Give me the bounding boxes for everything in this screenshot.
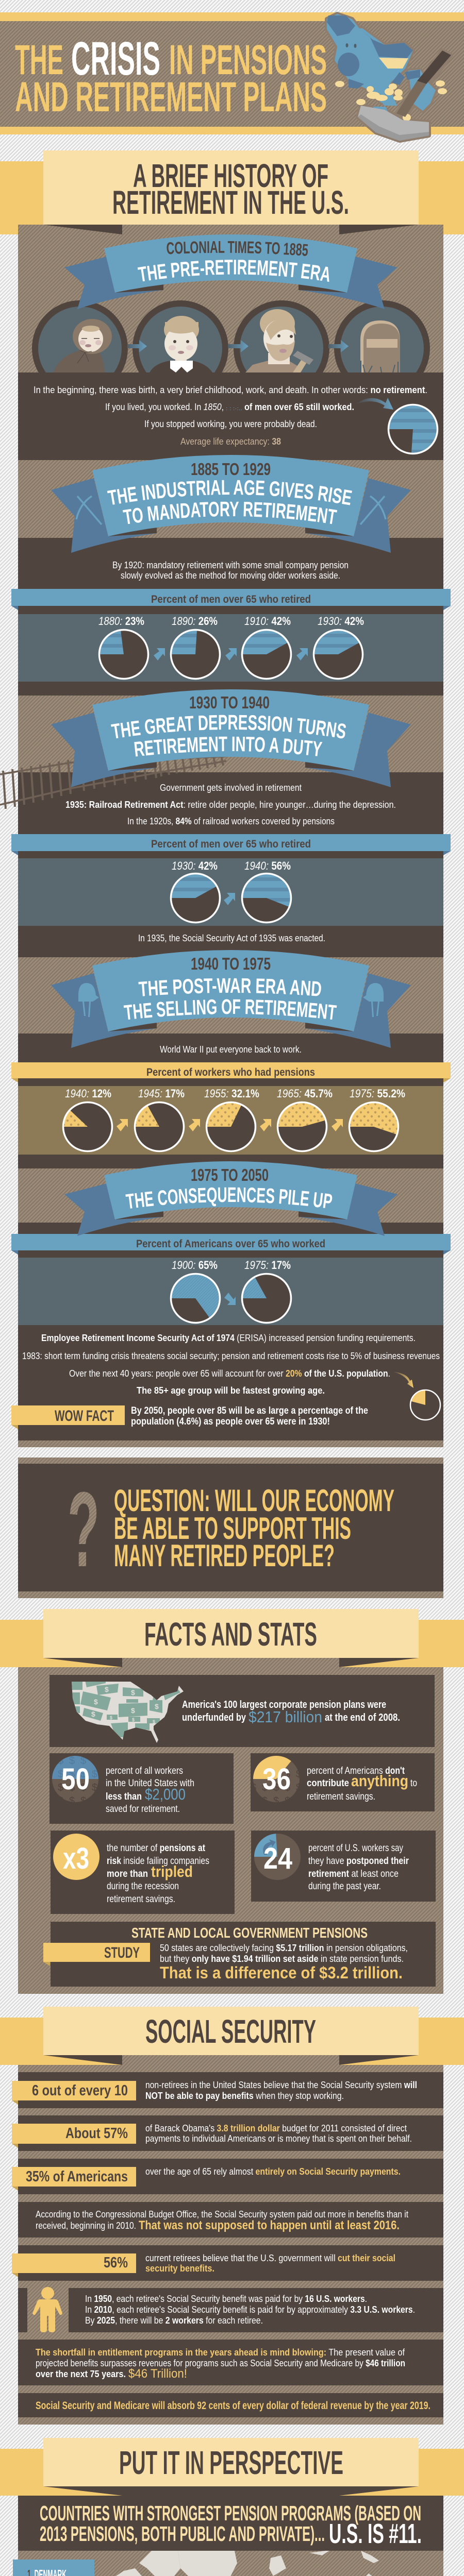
- icon: US map of bills: $: [105, 1685, 109, 1693]
- row: 6 out of 10: [12, 2072, 443, 2108]
- card: tripled pensions at risk: more than: [107, 1868, 148, 1879]
- title: [15, 32, 327, 121]
- row: congressional budget office: That was not supposed to happen until at least 2016.: [139, 2218, 400, 2232]
- row: workers per retiree: In 2010, each retiree's Social Security benefit is paid for by approximately 3.3 U.S. workers.: [85, 2304, 415, 2315]
- text: underfunded: underfunded by: [182, 1712, 246, 1723]
- text: world war II: World War II put everyone back to work.: [160, 1044, 302, 1055]
- text block: government involvement: Government gets involved in retirement: [160, 782, 302, 793]
- row: 56 percent: security benefits.: [145, 2263, 214, 2274]
- chart: men retired 1880-1930: [18, 614, 443, 682]
- ribbon: great depression: 1930 TO 1940: [189, 693, 270, 712]
- card: 24 percent: during the past year.: [308, 1880, 381, 1892]
- ribbon: post-war era: [51, 950, 411, 1048]
- arrow: to small pie: [392, 1371, 413, 1388]
- icon: US map of bills: $: [94, 1698, 98, 1706]
- text: underfunded: America's 100 largest corporate pension plans were: [182, 1699, 386, 1710]
- text block: consequences: [22, 1332, 440, 1396]
- card: tripled pensions at risk: risk inside failing companies: [107, 1855, 209, 1867]
- row: 35 percent of americans: over the age of 65 rely almost entirely on Social Security payments.: [145, 2166, 401, 2177]
- icon: US map of bills: $: [153, 1719, 155, 1724]
- ribbon: colonial times: [64, 234, 397, 309]
- card: 24 percent: they have postponed their: [308, 1855, 409, 1867]
- icon: US map of bills: $: [155, 1702, 159, 1710]
- band: percent of men retired 1930s: [11, 834, 451, 855]
- card: state and local government pensions: STATE AND LOCAL GOVERNMENT PENSIONS: [131, 1925, 368, 1941]
- card: tripled pensions at risk: [51, 1831, 235, 1914]
- row: 56 percent: current retirees believe that the U.S. government will cut their social: [145, 2252, 395, 2263]
- text block: pre-retirement era: : : :·:..: [226, 406, 242, 411]
- card: tripled pensions at risk: the number of pensions at: [107, 1842, 205, 1854]
- title: THE: [15, 37, 63, 83]
- heading: [112, 157, 349, 221]
- text block: pre-retirement era: If you stopped working, you were probably dead.: [144, 418, 317, 429]
- card: 24 percent: percent of U.S. workers say: [308, 1842, 403, 1854]
- card: underfunded pension plans: [49, 1675, 435, 1747]
- card: 36 percent: [251, 1753, 435, 1811]
- text block: pre-retirement era: If you lived, you worked. In 1850,: [105, 401, 224, 412]
- row: 6 out of 10: NOT be able to pay benefits when they stop working.: [145, 2090, 344, 2101]
- title: IN PENSIONS: [169, 37, 327, 83]
- section header: facts and stats: [0, 1609, 464, 1667]
- panel: facts and stats background: [18, 1658, 443, 1994]
- ribbon: post-war era: THE POST-WAR ERA AND: [138, 978, 321, 996]
- title: CRISIS: [71, 32, 160, 85]
- chart: workers with pensions 1940-1975: 1945: 17%: [138, 1087, 185, 1100]
- row: about 57 percent: of Barack Obama's 3.8 trillion dollar budget for 2011 consisted of direct: [145, 2123, 407, 2133]
- ribbon: great depression: RETIREMENT INTO A DUTY: [134, 737, 323, 756]
- chart: men retired 1880-1930: 1910: 42%: [244, 615, 291, 628]
- card: tripled pensions at risk: retirement savings.: [107, 1893, 175, 1905]
- text block: pre-retirement era: Average life expectancy: 38: [180, 436, 281, 447]
- chart: workers with pensions 1940-1975: 1965: 45.7%: [277, 1087, 333, 1100]
- text block: government involvement: 1935: Railroad Retirement Act: retire older people, hire younger…during the depression.: [65, 799, 396, 810]
- row: workers per retiree: In 1950, each retiree's Social Security benefit was paid for by 16 U.S. workers.: [85, 2293, 367, 2304]
- row: 6 out of 10: non-retirees in the United States believe that the Social Security system will: [145, 2079, 417, 2090]
- row: workers per retiree: [18, 2287, 443, 2332]
- chart: americans who worked 1900-1975: [18, 1258, 443, 1325]
- card: 50 percent: percent of all workers: [106, 1765, 183, 1776]
- card: 50 percent: $2,000: [145, 1785, 186, 1803]
- card: 24 percent: [251, 1831, 436, 1902]
- panel: ranking list: [13, 2560, 94, 2576]
- row: congressional budget office: received, beginning in 2010.: [36, 2220, 136, 2231]
- icon: person: [32, 2287, 62, 2332]
- panel: history background blocks: [18, 234, 443, 1447]
- row: about 57 percent: payments to individual Americans or is money that is spent on their behalf.: [145, 2133, 412, 2144]
- band: workers with pensions: Percent of workers who had pensions: [146, 1066, 315, 1078]
- section header: social security: [0, 2007, 464, 2065]
- ribbon: industrial age: THE INDUSTRIAL AGE GIVES RISE: [107, 480, 352, 505]
- row: 92 cents: [18, 2393, 443, 2417]
- card: state and local government pensions: [43, 1922, 436, 1987]
- card: 36 percent: to: [410, 1777, 417, 1789]
- card: 24 percent: 24: [263, 1842, 292, 1875]
- callout: wow fact: population (4.6%) as people over 65 were in 1930!: [131, 1416, 330, 1427]
- ribbon: colonial times: COLONIAL TIMES TO 1885: [167, 241, 308, 256]
- arrow: baby to child: [127, 340, 147, 352]
- text block: 1920 mandatory retirement: slowly evolved as the method for moving older workers aside.: [121, 570, 340, 581]
- row: entitlement shortfall: over the next 75 years.: [36, 2368, 126, 2379]
- icon: US map of bills: $: [132, 1717, 135, 1722]
- ribbon: industrial age: TO MANDATORY RETIREMENT: [123, 502, 337, 524]
- chart: workers with pensions 1940-1975: 1955: 32.1%: [204, 1087, 259, 1100]
- heading: countries with strongest pension programs: [40, 2501, 422, 2549]
- text: underfunded: at the end of 2008.: [325, 1712, 400, 1723]
- chart: men retired 1880-1930: 1890: 26%: [172, 615, 218, 628]
- icon: worker with hammer: [245, 309, 313, 372]
- pie: share of population over 65: [410, 1390, 440, 1420]
- arrow: to 75% pie: [355, 398, 393, 410]
- tag: study: [43, 1943, 150, 1966]
- card: 50 percent: 50: [61, 1762, 90, 1796]
- icon: US map of bills: $: [131, 1706, 135, 1715]
- chart: men retired 1880-1930: 1880: 23%: [98, 615, 144, 628]
- icon: helmets: [78, 983, 384, 1017]
- callout: wow fact: WOW FACT: [55, 1408, 114, 1425]
- band: americans who worked: [11, 1234, 451, 1255]
- row: 56 percent: 56%: [104, 2255, 128, 2271]
- callout: wow fact: [11, 1405, 368, 1429]
- text: underfunded: [182, 1699, 400, 1726]
- icon: hammer smashing piggy bank: [327, 14, 451, 141]
- row: 35 percent of americans: [12, 2159, 443, 2194]
- card: 24 percent: retirement at least once: [308, 1868, 399, 1879]
- card: 36 percent: retirement savings.: [307, 1791, 375, 1802]
- pie: 1850 men working: [389, 405, 437, 453]
- row: about 57 percent: About 57%: [65, 2125, 128, 2142]
- card: tripled pensions at risk: x3: [63, 1842, 89, 1875]
- section header: put it in perspective: [0, 2438, 464, 2551]
- text: social security act: In 1935, the Social Security Act of 1935 was enacted.: [138, 933, 325, 943]
- ribbon: consequences pile up: [64, 1161, 397, 1236]
- row: congressional budget office: [18, 2202, 443, 2238]
- chart: americans who worked 1900-1975: 1975: 17%: [244, 1259, 291, 1272]
- panel: question: [18, 1458, 443, 1598]
- band: percent of men retired: Percent of men over 65 who retired: [151, 594, 311, 605]
- title banner: [0, 12, 464, 134]
- card: 36 percent: percent of Americans don't: [307, 1765, 405, 1776]
- text: underfunded: $217 billion: [248, 1708, 322, 1726]
- ribbon: consequences pile up: THE CONSEQUENCES PILE UP: [125, 1187, 332, 1209]
- row: entitlement shortfall: $46 Trillion!: [128, 2367, 187, 2381]
- ribbon: consequences pile up: 1975 TO 2050: [191, 1165, 269, 1184]
- text block: government involvement: In the 1920s, 84% of railroad workers covered by pensions: [127, 816, 335, 826]
- chart: men retired 1930-1940: 1930: 42%: [172, 859, 218, 872]
- card: 36 percent: 36: [262, 1762, 291, 1796]
- chart: men retired 1930-1940: [18, 858, 443, 926]
- ribbon: great depression: THE GREAT DEPRESSION TURNS: [111, 715, 346, 739]
- band: americans who worked: Percent of Americans over 65 who worked: [136, 1238, 325, 1250]
- ribbon: industrial age: 1885 TO 1929: [191, 460, 271, 479]
- icon: child: [150, 316, 212, 372]
- card: 50 percent: in the United States with: [106, 1777, 194, 1789]
- row: entitlement shortfall: The shortfall in entitlement programs in the years ahead is mind blowing: The present value of: [36, 2347, 405, 2358]
- portraits: life stages: [32, 300, 430, 372]
- ribbon: great depression: [51, 689, 411, 787]
- ribbon: colonial times: THE PRE-RETIREMENT ERA: [137, 260, 329, 282]
- card: state and local government pensions: That is a difference of $3.2 trillion.: [160, 1963, 403, 1982]
- section header: a brief history: [0, 150, 464, 240]
- question text: [114, 1483, 394, 1573]
- card: tripled pensions at risk: during the recession: [107, 1880, 179, 1892]
- arrow: child to worker: [228, 340, 248, 352]
- panel: social security background: [18, 2055, 443, 2425]
- icon: baby: [53, 319, 112, 372]
- ribbon: post-war era: THE SELLING OF RETIREMENT: [124, 999, 337, 1020]
- chart: workers with pensions 1940-1975: 1975: 55.2%: [350, 1087, 405, 1100]
- card: 50 percent: [49, 1753, 234, 1824]
- icon: US map of bills: $: [91, 1710, 95, 1718]
- row: workers per retiree: By 2025, there will be 2 workers for each retiree.: [85, 2315, 263, 2326]
- tag: study: STUDY: [104, 1944, 140, 1961]
- text block: 1920 mandatory retirement: [112, 560, 349, 581]
- card: 50 percent: less than: [106, 1791, 142, 1802]
- row: about 57 percent: [12, 2115, 443, 2151]
- text block: government involvement: [65, 782, 396, 826]
- card: 50 percent: saved for retirement.: [106, 1803, 180, 1815]
- band: workers with pensions: [11, 1062, 451, 1082]
- card: state and local government pensions: but they only have $1.94 trillion set aside in state pension funds.: [160, 1953, 404, 1964]
- text block: pre-retirement era: [34, 384, 427, 447]
- row: entitlement shortfall: [18, 2340, 443, 2385]
- icon: US map of bills: [70, 1680, 186, 1744]
- card: 36 percent: contribute: [307, 1777, 349, 1789]
- icon: US map of bills: $: [110, 1715, 112, 1720]
- chart: men retired 1880-1930: 1930: 42%: [318, 615, 364, 628]
- chart: workers with pensions 1940-1975: 1940: 12%: [65, 1087, 111, 1100]
- row: 56 percent: [12, 2245, 443, 2281]
- section header: facts and stats: FACTS AND STATS: [144, 1616, 317, 1653]
- row: 35 percent of americans: 35% of Americans: [26, 2168, 128, 2185]
- text block: consequences: Employee Retirement Income Security Act of 1974 (ERISA) increased pension funding requirements.: [41, 1332, 416, 1343]
- band: percent of men retired 1930s: Percent of men over 65 who retired: [151, 838, 311, 850]
- text block: consequences: Over the next 40 years: people over 65 will account for over 20% of the U.S. population.: [69, 1368, 390, 1379]
- text block: 1920 mandatory retirement: By 1920: mandatory retirement with some small company pension: [112, 560, 349, 570]
- map: world pension ranking: [18, 2550, 443, 2576]
- card: 36 percent: anything: [351, 1772, 408, 1790]
- heading: A BRIEF HISTORY OF: [133, 157, 328, 194]
- icon: US map of bills: $: [131, 1688, 135, 1697]
- section header: social security: SOCIAL SECURITY: [145, 2013, 316, 2050]
- row: entitlement shortfall: projected benefits surpasses revenues for programs such as Social Security and Medicare by $46 trillion: [36, 2358, 405, 2368]
- ribbon: industrial age: [51, 455, 411, 553]
- card: tripled pensions at risk: tripled: [151, 1862, 193, 1880]
- chart: men retired 1930-1940: 1940: 56%: [244, 859, 291, 872]
- panel: question: ?: [68, 1470, 100, 1589]
- row: 6 out of 10: 6 out of every 10: [32, 2082, 128, 2099]
- text block: pre-retirement era: In the beginning, there was birth, a very brief childhood, work, and death. In other words: no retirement.: [34, 384, 427, 395]
- arrow: worker to tomb: [328, 340, 349, 352]
- text block: pre-retirement era: of men over 65 still worked.: [244, 401, 354, 412]
- card: state and local government pensions: 50 states are collectively facing $5.17 trillion in pension obligations,: [160, 1942, 408, 1953]
- ribbon: post-war era: 1940 TO 1975: [191, 954, 271, 973]
- chart: workers with pensions 1940-1975: [18, 1086, 443, 1155]
- chart: americans who worked 1900-1975: 1900: 65%: [172, 1259, 218, 1272]
- band: percent of men retired: [11, 589, 451, 610]
- icon: pickaxes: [76, 496, 386, 524]
- text block: consequences: The 85+ age group will be fastest growing age.: [137, 1385, 325, 1396]
- callout: wow fact: By 2050, people over 85 will be as large a percentage of the: [131, 1405, 368, 1416]
- icon: railroad tracks: [0, 753, 226, 809]
- icon: tombstone: [360, 320, 400, 372]
